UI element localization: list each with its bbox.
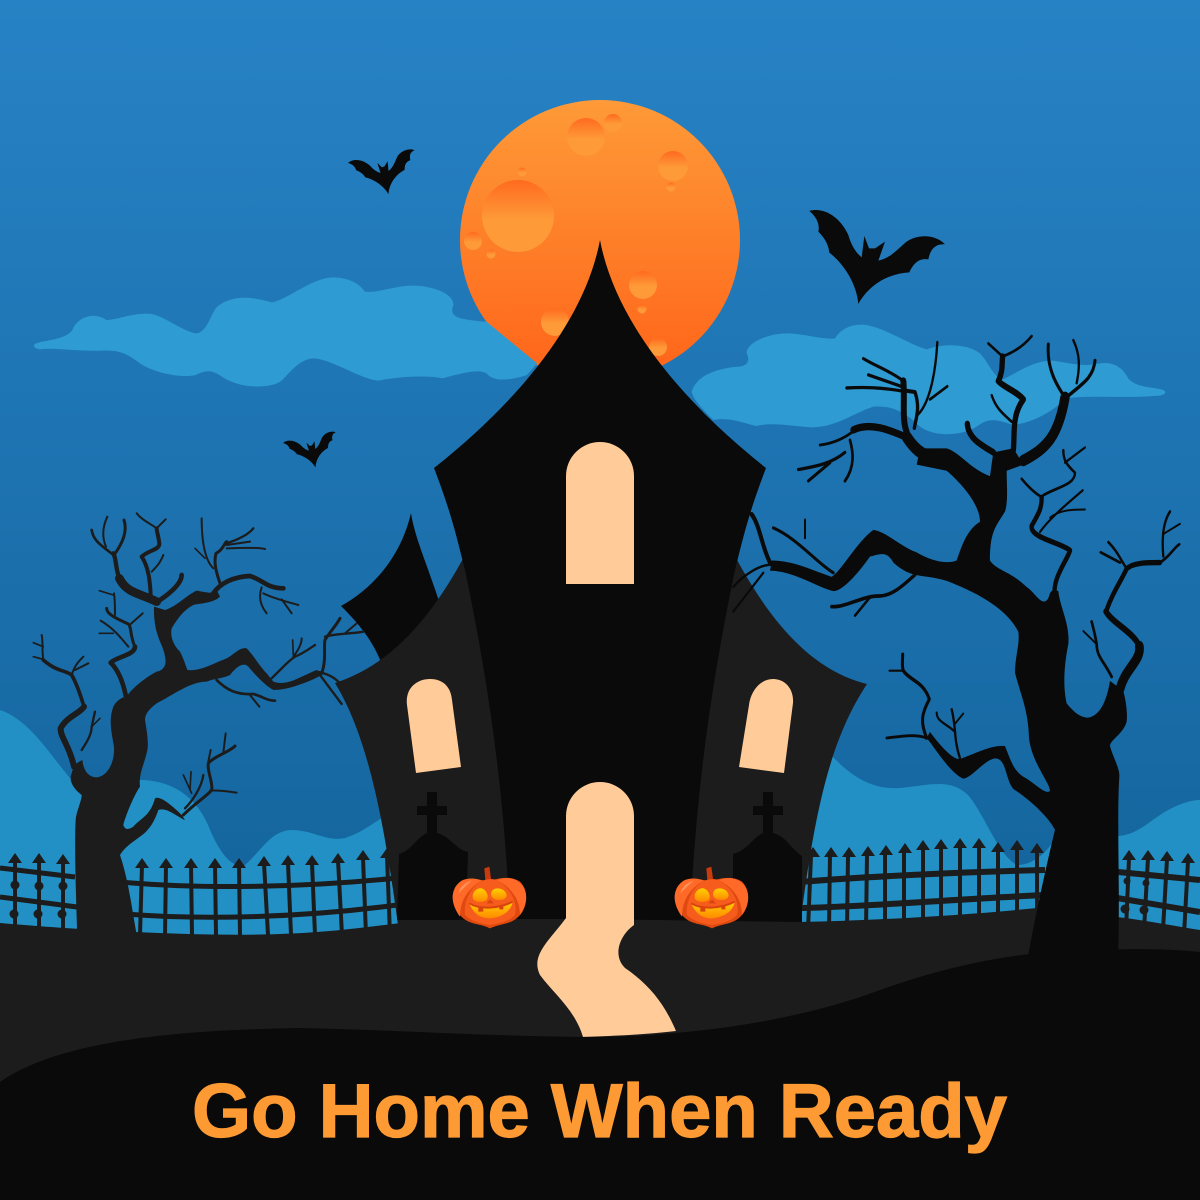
tower window bbox=[566, 442, 634, 584]
cloud: left bbox=[34, 277, 537, 387]
pumpkin: right bbox=[675, 867, 748, 928]
house bbox=[335, 240, 867, 925]
fence: right section bbox=[800, 838, 1200, 935]
right wing window bbox=[739, 679, 793, 773]
cloud: right bbox=[692, 325, 1165, 434]
tree: right bbox=[733, 336, 1180, 954]
hills bbox=[0, 710, 1200, 940]
fence: left section bbox=[0, 848, 397, 935]
right wing bbox=[680, 560, 867, 925]
pumpkin: left bbox=[453, 867, 526, 928]
moon bbox=[460, 100, 740, 380]
bat: top left bbox=[348, 135, 427, 204]
tree: left bbox=[33, 513, 363, 937]
ground: foreground hill bbox=[0, 949, 1200, 1200]
central tower bbox=[434, 240, 766, 925]
door and path bbox=[537, 782, 676, 1037]
gravestone: right bbox=[733, 792, 802, 922]
small roof spike bbox=[341, 513, 445, 662]
bat: lower left bbox=[283, 420, 346, 475]
bat: right bbox=[809, 210, 945, 304]
ground: back hill bbox=[0, 908, 1200, 1200]
title: Go Home When Ready bbox=[192, 1069, 1007, 1154]
left wing window bbox=[407, 679, 461, 773]
gravestone: left bbox=[397, 792, 468, 920]
left wing bbox=[335, 555, 520, 925]
